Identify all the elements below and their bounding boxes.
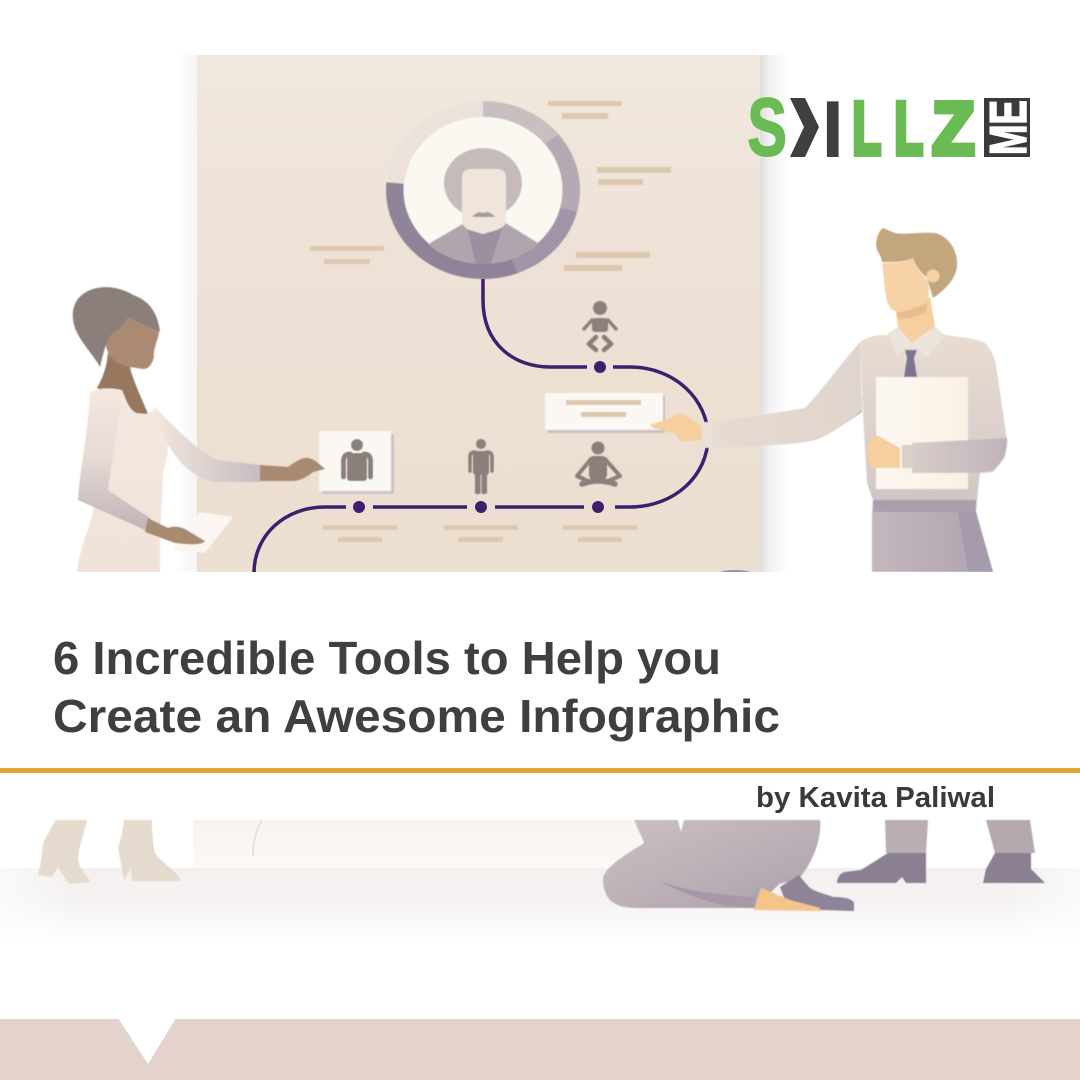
chart: profile donut ring — [395, 109, 571, 271]
figure: kneeling person — [603, 820, 854, 911]
card: person icon — [319, 431, 394, 494]
floor shadow — [0, 868, 1080, 940]
white title band — [0, 572, 1080, 820]
figure: woman — [73, 287, 325, 572]
figure: man's legs and shoes — [837, 820, 1045, 883]
icon: baby — [584, 301, 616, 350]
logo: Skillz Me: S — [748, 82, 787, 173]
icon: standing person — [470, 439, 492, 494]
figure: woman's boots — [38, 820, 180, 884]
logo: Skillz Me: L — [894, 88, 923, 171]
divider: gold rule — [0, 768, 1080, 773]
logo: Skillz Me: I — [822, 85, 844, 175]
byline: by Kavita Paliwal — [756, 782, 995, 814]
figure: man — [650, 228, 1007, 572]
panel: upper illustration board — [175, 55, 788, 572]
title: 6 Incredible Tools to Help you — [53, 632, 721, 684]
logo: Skillz Me: Z — [932, 88, 974, 171]
logo: Skillz Me — [748, 82, 1038, 175]
text placeholder bars — [310, 101, 671, 542]
logo: Skillz Me: ME — [980, 100, 1038, 155]
small dark arc at panel bottom — [718, 570, 752, 578]
timeline path with dots — [254, 279, 708, 573]
title: Create an Awesome Infographic — [53, 690, 780, 742]
icon: meditating person — [577, 442, 620, 484]
logo: Skillz Me: L — [852, 88, 881, 171]
card: text card held by man — [545, 393, 665, 433]
bottom band with notch — [0, 1018, 1080, 1080]
title — [53, 632, 780, 742]
panel: lower board section — [193, 820, 640, 868]
icon: portrait of man in circle — [404, 117, 562, 270]
